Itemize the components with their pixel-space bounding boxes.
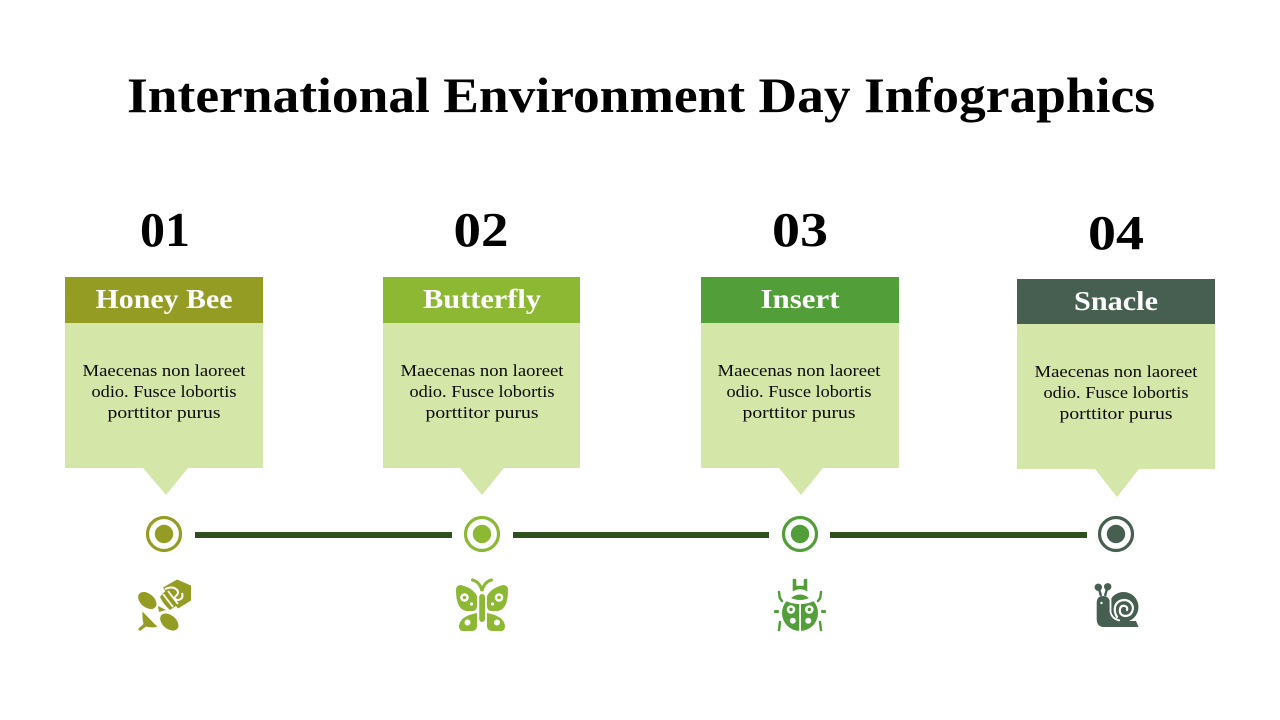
description 04: porttitor purus [1060, 404, 1172, 423]
step 04: snail [1017, 205, 1215, 627]
label 01: Honey Bee [96, 284, 233, 314]
label 02: Butterfly [423, 284, 542, 314]
icon: snail [1095, 583, 1138, 627]
callout body 02 [383, 323, 580, 495]
description 02: Maecenas non laoreet [400, 361, 564, 380]
step 01: honey bee [65, 202, 263, 634]
timeline connector lines [195, 532, 1087, 538]
callout body 03 [701, 323, 899, 495]
header bar 01 [65, 277, 263, 323]
description 03: porttitor purus [742, 403, 856, 422]
timeline marker 04 [1100, 518, 1132, 550]
timeline marker 01 [148, 518, 180, 550]
icon: ladybug [774, 579, 826, 632]
header bar 04 [1017, 279, 1215, 324]
icon: butterfly [456, 580, 508, 631]
step 03: insect [701, 202, 899, 632]
timeline marker 02 [466, 518, 498, 550]
description 04: Maecenas non laoreet [1034, 362, 1198, 381]
timeline marker 03 [784, 518, 816, 550]
step 02: butterfly [383, 202, 580, 631]
description 01: porttitor purus [108, 403, 220, 422]
label 03: Insert [760, 284, 840, 314]
description 01: odio. Fusce lobortis [92, 382, 236, 401]
description 01: Maecenas non laoreet [82, 361, 246, 380]
description 02: porttitor purus [426, 403, 538, 422]
header bar 02 [383, 277, 580, 323]
title: International Environment Day Infographics [127, 67, 1155, 123]
icon: bee [135, 580, 191, 634]
number 02: 02 [454, 202, 508, 257]
description 03: odio. Fusce lobortis [726, 382, 872, 401]
description 02: odio. Fusce lobortis [410, 382, 554, 401]
description 04: odio. Fusce lobortis [1044, 383, 1188, 402]
number 03: 03 [772, 202, 828, 257]
number 04: 04 [1088, 205, 1144, 260]
number 01: 01 [140, 202, 190, 257]
callout body 04 [1017, 324, 1215, 497]
header bar 03 [701, 277, 899, 323]
callout body 01 [65, 323, 263, 495]
label 04: Snacle [1074, 286, 1158, 316]
description 03: Maecenas non laoreet [718, 361, 881, 380]
